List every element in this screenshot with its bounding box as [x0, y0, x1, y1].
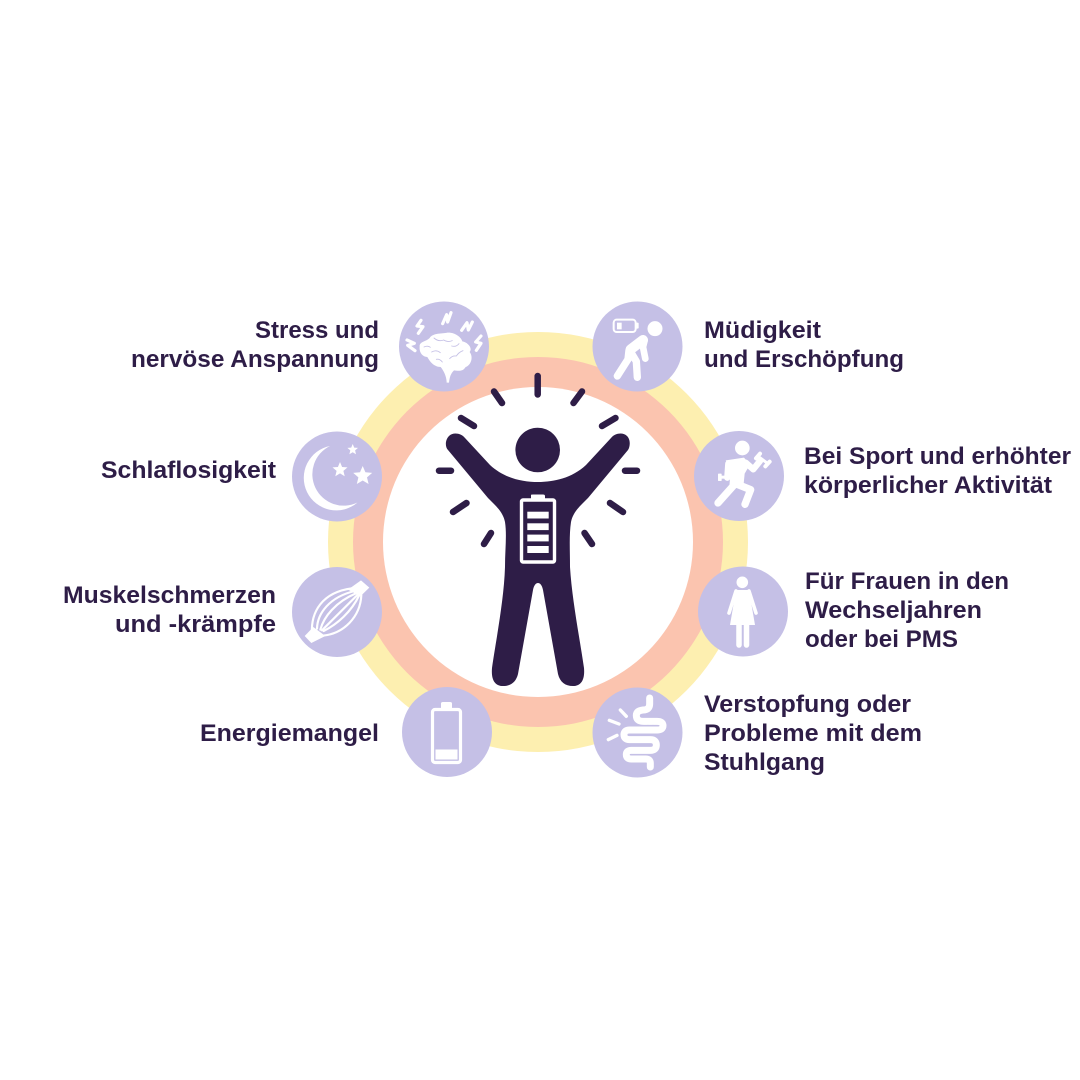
body silhouette — [446, 434, 630, 686]
label: Frauen: Für Frauen in den — [805, 568, 1009, 595]
bent body — [631, 340, 643, 349]
label: Sport: körperlicher Aktivität — [804, 472, 1052, 499]
central white disc — [383, 387, 693, 697]
label: Verstopfung: Verstopfung oder — [704, 691, 911, 718]
label: Muskelschmerzen: Muskelschmerzen — [63, 582, 276, 609]
arms — [729, 591, 756, 613]
gut dots — [633, 724, 653, 727]
icon: woman — [698, 566, 788, 656]
legs — [718, 484, 751, 504]
label: Verstopfung: Probleme mit dem — [704, 720, 922, 747]
legs — [739, 624, 746, 645]
label: Stress: nervöse Anspannung — [131, 346, 379, 373]
icon: intestine — [592, 688, 682, 778]
head — [735, 441, 750, 455]
label: Frauen — [805, 568, 1009, 653]
label: Energiemangel: Energiemangel — [200, 720, 379, 747]
charge level — [436, 750, 458, 760]
label: Müdigkeit — [704, 317, 904, 373]
muscle tendons — [305, 580, 369, 643]
head — [515, 428, 560, 472]
gut — [624, 698, 663, 767]
head — [736, 576, 748, 588]
battery outline — [432, 710, 460, 762]
label: Müdigkeit: Müdigkeit — [704, 317, 821, 344]
crescent — [304, 446, 358, 510]
dumbbell left — [718, 474, 735, 482]
icon: empty battery — [402, 687, 492, 777]
muscle fibres — [312, 588, 361, 636]
torso — [726, 458, 750, 487]
ring: peach middle — [353, 357, 723, 727]
battery full — [522, 494, 554, 562]
pain rays — [608, 710, 626, 740]
icon: tired person carrying low battery — [592, 302, 682, 392]
label: Verstopfung — [704, 691, 922, 776]
label: Verstopfung: Stuhlgang — [704, 749, 825, 776]
stress bolts — [407, 313, 481, 351]
icon: runner with dumbbells — [694, 431, 784, 521]
label: Sport: Bei Sport und erhöhter — [804, 443, 1071, 470]
label: Stress — [131, 317, 379, 373]
battery cap — [441, 702, 452, 709]
icon: moon and stars — [292, 432, 382, 522]
low battery — [614, 320, 636, 332]
label: Muskelschmerzen: und -krämpfe — [115, 611, 276, 638]
dress — [730, 590, 755, 625]
head — [647, 321, 662, 336]
energy rays — [439, 376, 637, 544]
label: Stress: Stress und — [255, 317, 379, 344]
label: Müdigkeit: und Erschöpfung — [704, 346, 904, 373]
brain — [420, 333, 472, 383]
arms — [727, 461, 760, 478]
brain folds — [424, 338, 463, 362]
label: Muskelschmerzen — [63, 582, 276, 638]
icon: muscle — [292, 567, 382, 657]
label: Sport — [804, 443, 1071, 499]
label: Frauen: Wechseljahren — [805, 597, 982, 624]
dumbbell right — [756, 454, 770, 466]
ring: yellow outer — [328, 332, 748, 752]
stars — [347, 444, 358, 454]
label: Schlaflosigkeit: Schlaflosigkeit — [101, 457, 276, 484]
icon: brain with stress bolts — [399, 302, 489, 392]
label: Frauen: oder bei PMS — [805, 626, 958, 653]
central figure with full battery — [439, 376, 637, 686]
